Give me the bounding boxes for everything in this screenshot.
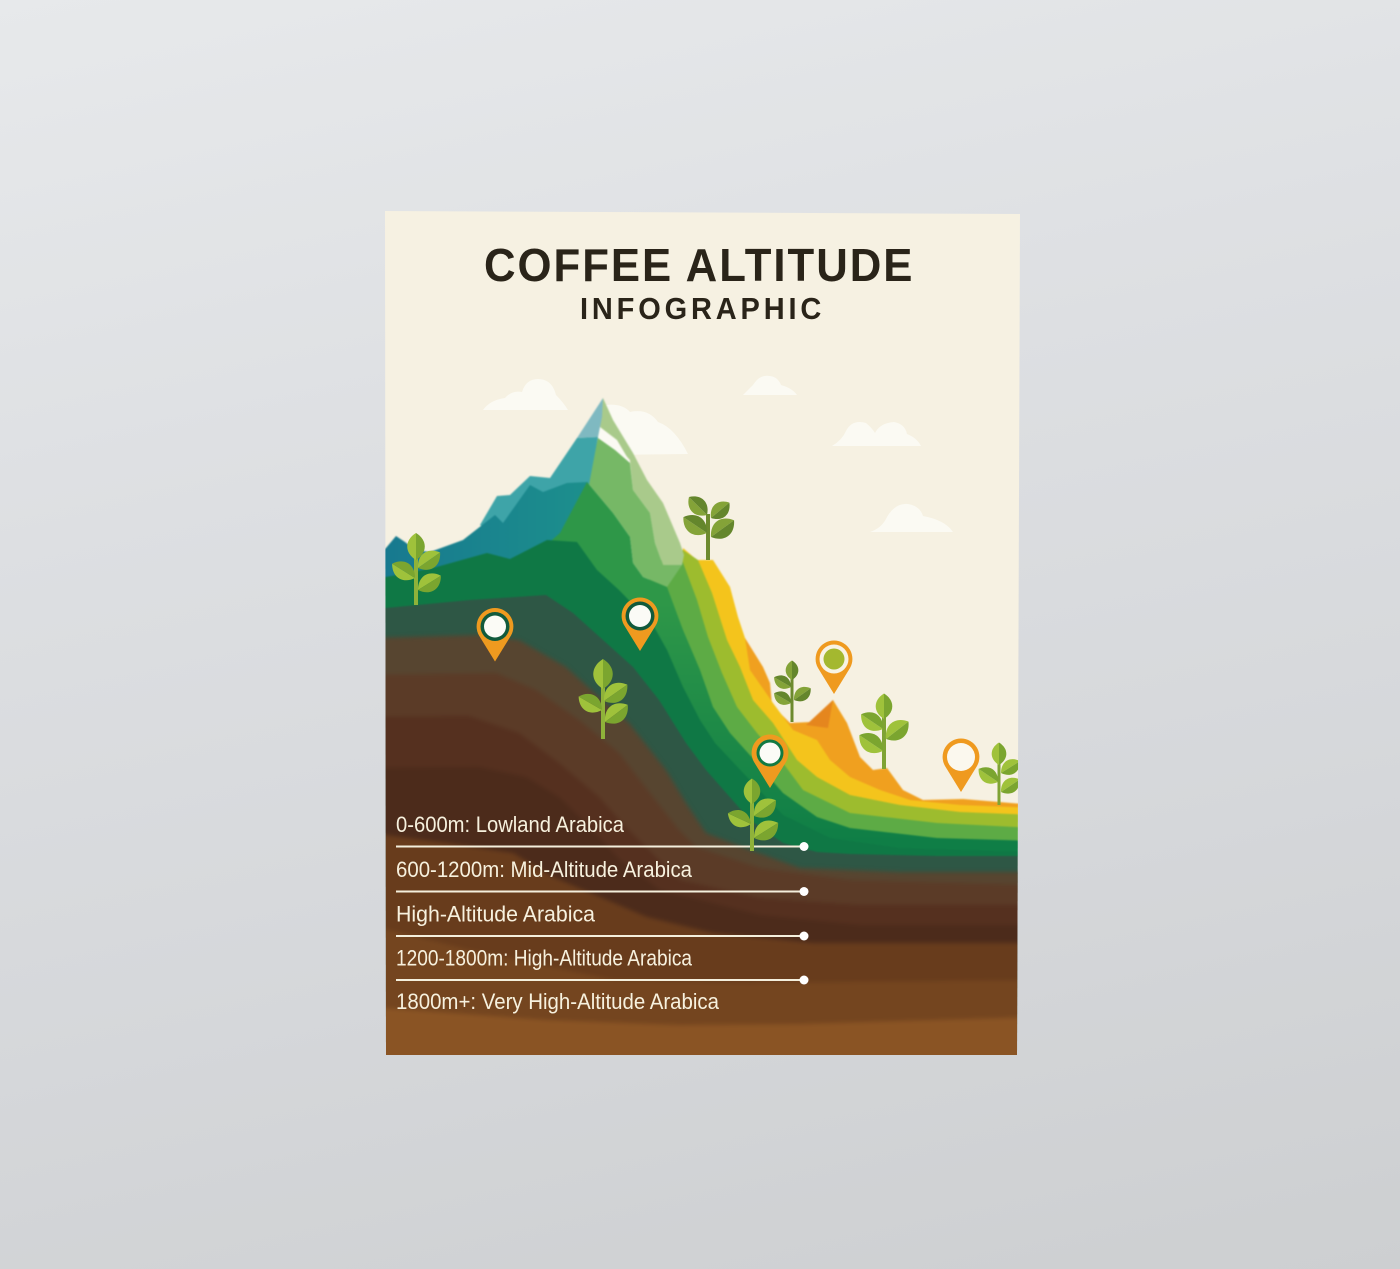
green layer bbox=[552, 482, 1018, 852]
icon: location pin 3 bbox=[816, 641, 852, 694]
orange foothill layer bbox=[744, 638, 1018, 808]
legend altitude list bbox=[396, 812, 808, 1014]
icon: plant far right bbox=[974, 742, 1024, 805]
soil band 5 bbox=[386, 834, 1018, 984]
lime layer bbox=[682, 550, 1018, 828]
orange shadow facet bbox=[806, 700, 833, 728]
icon: plant on foothill bbox=[771, 660, 815, 722]
icon: plant on legend line bbox=[724, 778, 783, 851]
icon: plant on ridge bbox=[678, 491, 740, 560]
legend row 1: 0-600m: Lowland Arabica bbox=[396, 812, 625, 837]
cloud 3 bbox=[743, 376, 797, 395]
cloud 5 bbox=[870, 504, 953, 532]
icon: plant left edge bbox=[387, 533, 446, 605]
soil layers bbox=[370, 635, 1035, 1075]
legend divider 1 bbox=[396, 842, 808, 851]
soil band 6 bbox=[386, 930, 1017, 1024]
dark green layer bbox=[385, 539, 786, 818]
cloud 2 behind peak bbox=[605, 405, 688, 455]
legend divider 2 bbox=[396, 887, 808, 896]
title: COFFEE ALTITUDE bbox=[484, 239, 912, 291]
poster card bbox=[370, 205, 1035, 1075]
mid green layer bbox=[666, 562, 1018, 842]
soil band 7 bbox=[386, 1008, 1017, 1055]
pale blue summit bbox=[577, 398, 603, 438]
legend row 2: 600-1200m: Mid-Altitude Arabica bbox=[396, 857, 693, 882]
legend divider 3 bbox=[396, 932, 808, 940]
icon: location pin 1 bbox=[477, 608, 513, 662]
pale green ridge bbox=[600, 398, 684, 565]
cloud 4 bbox=[832, 422, 921, 446]
soil band 4 bbox=[386, 770, 1017, 940]
icon: location pin 2 bbox=[622, 598, 658, 651]
mountain terrain layers bbox=[370, 398, 1035, 1075]
cloud 1 bbox=[483, 379, 568, 410]
title: INFOGRAPHIC bbox=[580, 292, 821, 326]
slate green layer bbox=[386, 594, 1018, 997]
light teal face bbox=[480, 437, 598, 540]
title bbox=[486, 248, 911, 320]
light green face bbox=[587, 438, 682, 587]
yellow layer bbox=[682, 548, 1018, 815]
snow patch bbox=[598, 427, 629, 462]
legend row 3: High-Altitude Arabica bbox=[396, 902, 596, 926]
dark teal face bbox=[370, 482, 588, 600]
icon: location pin 5 bbox=[943, 739, 979, 792]
legend row 4: 1200-1800m: High-Altitude Arabica bbox=[396, 946, 693, 970]
soil band 1 bbox=[386, 634, 1018, 886]
legend row 5: 1800m+: Very High-Altitude Arabica bbox=[396, 989, 720, 1014]
icon: plant right of pin bbox=[854, 694, 914, 769]
legend divider 4 bbox=[396, 976, 808, 984]
soil band 3 bbox=[386, 718, 1018, 924]
soil band 2 bbox=[386, 676, 1018, 903]
icon: location pin 4 bbox=[752, 735, 788, 788]
icon: plant mid soil bbox=[574, 659, 633, 739]
